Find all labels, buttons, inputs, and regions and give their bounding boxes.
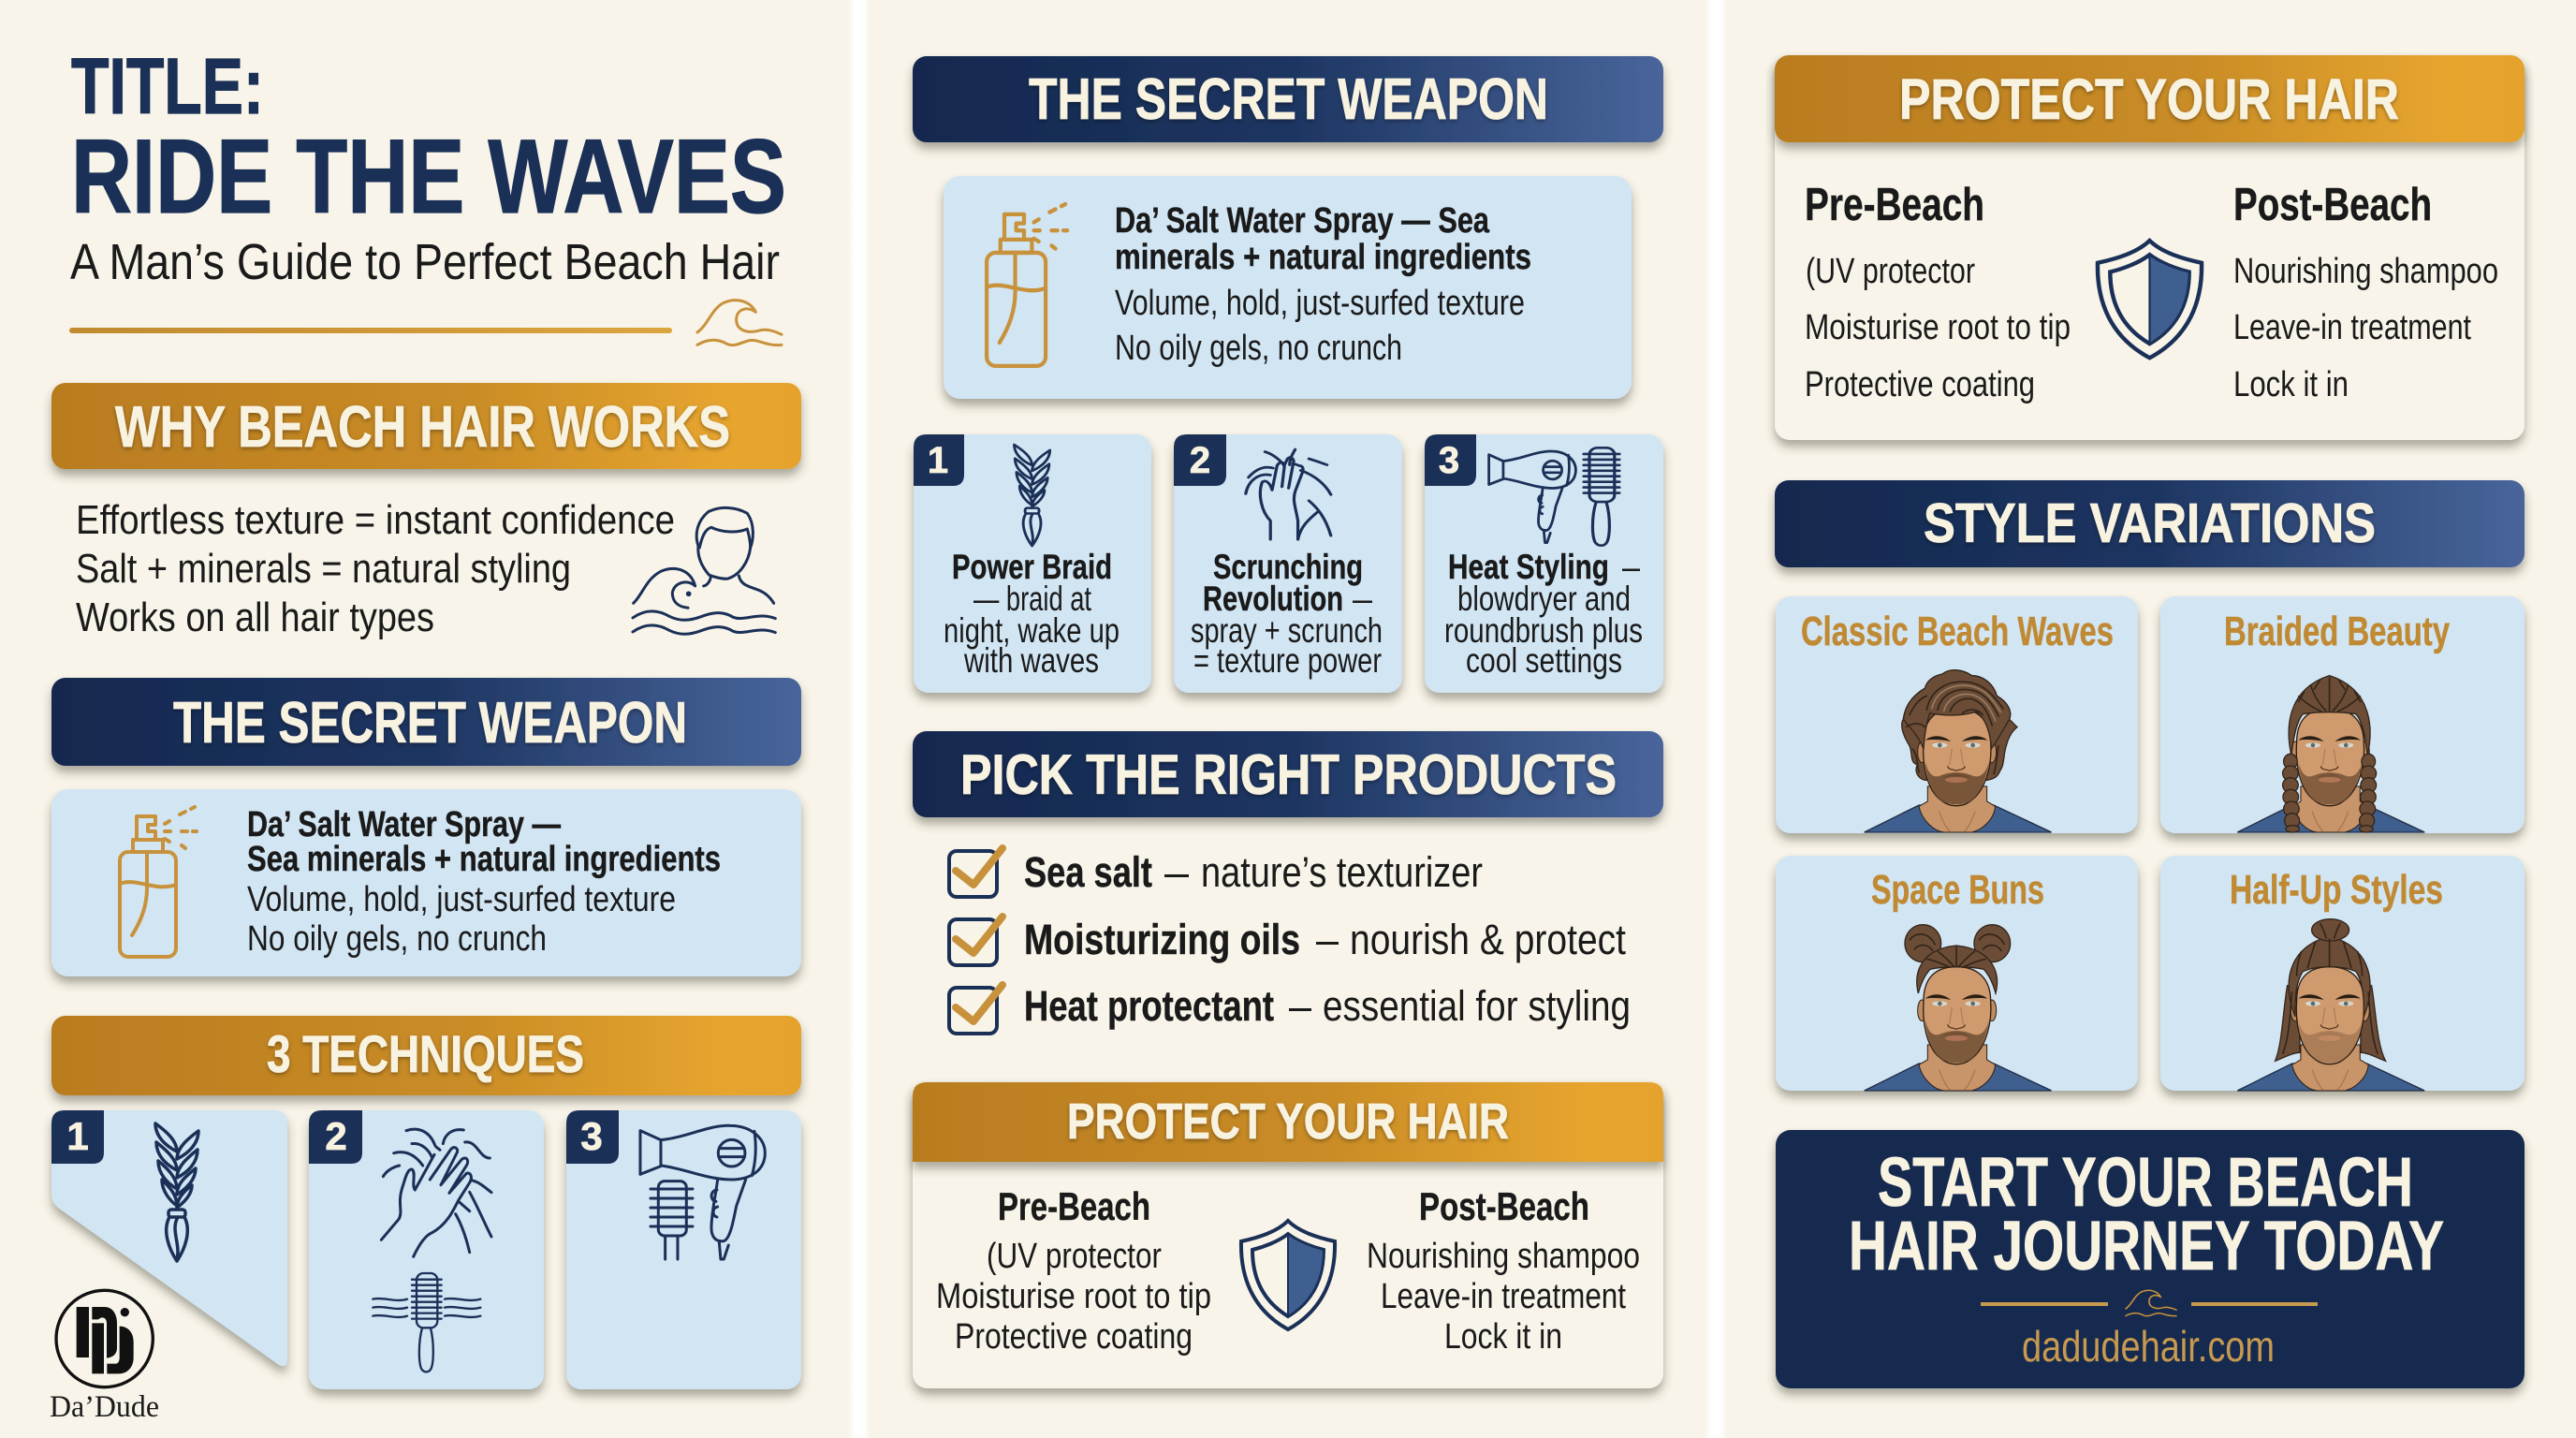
heading: protect your hair: PROTECT YOUR HAIR	[1899, 67, 2399, 131]
spray text	[247, 805, 721, 959]
style card: space buns	[1776, 856, 2138, 1091]
spray text: Sea minerals + natural ingredients	[247, 840, 721, 879]
style card: classic beach waves	[1776, 596, 2138, 833]
spray text: No oily gels, no crunch	[247, 919, 547, 959]
technique card 2: 2	[325, 1114, 347, 1158]
technique card: heat styling: —	[1622, 548, 1640, 586]
technique card: scrunching revolution: spray + scrunch	[1191, 611, 1383, 650]
technique card: power braid	[914, 434, 1151, 693]
heading: why beach hair works	[51, 383, 801, 469]
call to action: START YOUR BEACH	[1878, 1143, 2413, 1221]
heading: the secret weapon: THE SECRET WEAPON	[173, 691, 687, 756]
pre-beach column: Protective coating	[1805, 365, 2035, 404]
technique card: power braid: with waves	[963, 641, 1099, 680]
post-beach column: Leave-in treatment	[1381, 1277, 1626, 1316]
checklist: products: Heat protectant	[1024, 982, 1274, 1030]
icon: scrunching hands	[1246, 449, 1331, 539]
spray text: Da’ Salt Water Spray — Sea	[1115, 201, 1490, 241]
icon: round brush	[1584, 448, 1619, 546]
call to action	[1776, 1130, 2525, 1388]
spray text: minerals + natural ingredients	[1115, 238, 1531, 277]
technique card: power braid: — braid at	[973, 580, 1092, 618]
checklist: products: —	[1164, 848, 1189, 896]
panel: salt water spray	[51, 789, 801, 976]
text block: why beach hair works: Works on all hair types	[76, 594, 434, 640]
text block: why beach hair works: Effortless texture = instant confidence	[76, 497, 675, 543]
icon: spray bottle	[987, 204, 1067, 366]
icon: scrunching hands	[381, 1129, 491, 1256]
icon: braid	[155, 1123, 198, 1261]
technique card 1: 1	[66, 1114, 89, 1158]
pre-beach column: Protective coating	[955, 1317, 1193, 1357]
spray text: No oily gels, no crunch	[1115, 329, 1402, 368]
logo: Da'Dude: Da’Dude	[50, 1390, 159, 1424]
pre-beach column: (UV protector	[987, 1237, 1162, 1276]
icon: man in wave	[633, 507, 775, 634]
text block: why beach hair works	[76, 497, 675, 640]
technique card 3: 3	[580, 1114, 603, 1158]
post-beach column: Post-Beach	[1419, 1184, 1589, 1228]
style card: half-up styles	[2160, 856, 2525, 1091]
checklist: products: essential for styling	[1323, 982, 1631, 1030]
heading: protect your hair: PROTECT YOUR HAIR	[1067, 1093, 1509, 1150]
heading: style variations	[1775, 480, 2525, 567]
portrait: space buns	[1865, 925, 2052, 1091]
icon: brush with waves	[373, 1273, 480, 1372]
panel: right column	[1775, 55, 2525, 1388]
icon: shield	[2098, 241, 2202, 358]
heading: why beach hair works: WHY BEACH HAIR WORKS	[115, 395, 730, 460]
technique card 2	[309, 1110, 544, 1389]
pre-beach column: Moisturise root to tip	[936, 1277, 1211, 1316]
post-beach column: Leave-in treatment	[2233, 308, 2471, 347]
heading: style variations: STYLE VARIATIONS	[1924, 492, 2376, 554]
spray text: Volume, hold, just-surfed texture	[1115, 284, 1525, 323]
checklist: products: —	[1289, 982, 1311, 1030]
pre-beach column	[1805, 180, 2071, 404]
heading: pick the right products	[913, 731, 1663, 817]
pre-beach column: Pre-Beach	[1805, 180, 1984, 230]
style card: classic beach waves: Classic Beach Waves	[1801, 609, 2114, 654]
icon: checkbox 1	[949, 848, 1003, 897]
technique card: scrunching revolution	[1174, 434, 1402, 693]
technique card: scrunching revolution: —	[1353, 580, 1372, 618]
call to action: dadudehair.com	[2022, 1322, 2275, 1371]
spray text	[1115, 201, 1531, 368]
technique card 1	[51, 1110, 287, 1366]
technique card: heat styling	[1425, 434, 1663, 693]
icon: wave	[2126, 1290, 2176, 1316]
checklist: products: nature’s texturizer	[1201, 848, 1483, 896]
spray text: Da’ Salt Water Spray —	[247, 805, 561, 844]
technique card: power braid: Power Braid	[952, 548, 1112, 586]
panel: middle column	[913, 56, 1663, 1388]
technique card: scrunching revolution: Scrunching	[1213, 548, 1363, 586]
technique card: power braid: night, wake up	[944, 611, 1120, 650]
title: TITLE:	[71, 42, 264, 130]
heading: the secret weapon: THE SECRET WEAPON	[1029, 67, 1548, 132]
checklist: products: —	[1316, 916, 1339, 963]
heading: the secret weapon	[913, 56, 1663, 142]
subtitle: A Man’s Guide to Perfect Beach Hair	[70, 234, 780, 290]
style card: half-up styles: Half-Up Styles	[2230, 867, 2443, 913]
technique card: heat styling: 3	[1439, 440, 1459, 481]
portrait: braids	[2237, 676, 2424, 832]
logo: Da'Dude	[50, 1290, 159, 1424]
post-beach column: Lock it in	[2233, 365, 2349, 404]
icon: braid	[1014, 445, 1050, 546]
portrait: beach waves	[1865, 670, 2052, 832]
technique card: power braid: 1	[928, 440, 948, 481]
post-beach column	[2233, 180, 2498, 404]
checklist: products	[949, 848, 1631, 1034]
technique card: scrunching revolution: 2	[1190, 440, 1210, 481]
title: RIDE THE WAVES	[71, 118, 786, 235]
heading: 3 techniques: 3 TECHNIQUES	[267, 1024, 584, 1083]
title	[71, 42, 786, 235]
pre-beach column: Pre-Beach	[998, 1184, 1150, 1228]
technique card: scrunching revolution: Revolution	[1203, 580, 1343, 618]
technique card: heat styling: Heat Styling	[1448, 548, 1609, 586]
panel: protect your hair	[913, 1082, 1663, 1388]
checklist: products: Sea salt	[1024, 848, 1152, 896]
divider with wave icon	[69, 301, 782, 345]
icon: hair dryer and round brush	[640, 1125, 765, 1259]
technique card: heat styling: cool settings	[1466, 641, 1622, 680]
heading: protect your hair	[1775, 55, 2525, 142]
portrait: half-up	[2237, 919, 2424, 1091]
heading: pick the right products: PICK THE RIGHT PRODUCTS	[960, 743, 1617, 806]
pre-beach column: Moisturise root to tip	[1805, 308, 2071, 347]
icon: spray bottle	[120, 807, 197, 957]
text block: why beach hair works: Salt + minerals = natural styling	[76, 546, 571, 592]
technique card: scrunching revolution: = texture power	[1193, 641, 1382, 680]
style card: braided beauty: Braided Beauty	[2224, 609, 2450, 654]
post-beach column: Post-Beach	[2233, 180, 2432, 230]
spray text: Volume, hold, just-surfed texture	[247, 880, 676, 919]
icon: checkbox 2	[949, 917, 1003, 965]
technique card: heat styling: roundbrush plus	[1444, 611, 1643, 650]
icon: checkbox 3	[949, 985, 1003, 1034]
post-beach column: Nourishing shampoo	[2233, 252, 2498, 291]
heading: protect your hair	[913, 1082, 1663, 1162]
icon: hair dryer	[1489, 451, 1575, 543]
checklist: products: nourish & protect	[1350, 916, 1626, 963]
panel: protect your hair	[1775, 55, 2525, 440]
panel: salt water spray	[944, 176, 1632, 399]
technique card 3	[566, 1110, 801, 1389]
icon: shield	[1241, 1221, 1335, 1329]
style card: braided beauty	[2160, 596, 2525, 833]
heading: the secret weapon	[51, 678, 801, 766]
post-beach column	[1367, 1184, 1640, 1357]
heading: 3 techniques	[51, 1016, 801, 1095]
style card: space buns: Space Buns	[1871, 867, 2044, 913]
pre-beach column	[936, 1184, 1211, 1357]
post-beach column: Lock it in	[1444, 1317, 1562, 1357]
panel: left column	[50, 42, 801, 1424]
technique card: heat styling: blowdryer and	[1457, 580, 1631, 618]
pre-beach column: (UV protector	[1806, 252, 1975, 291]
post-beach column: Nourishing shampoo	[1367, 1237, 1640, 1276]
checklist: products: Moisturizing oils	[1024, 916, 1300, 963]
